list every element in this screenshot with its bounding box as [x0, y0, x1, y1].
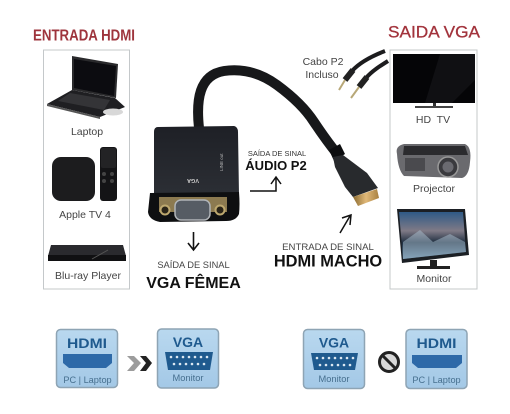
adapter front face	[148, 192, 240, 222]
badge: hdmi pc laptop: HDMI	[67, 336, 107, 351]
text: saida de sinal vga femea	[146, 260, 241, 292]
icon: projector	[397, 144, 470, 178]
adapter label: line out: LINE out	[219, 153, 224, 171]
panel: vga output devices	[390, 50, 477, 289]
cable	[198, 70, 338, 155]
text: hdmi macho: HDMI MACHO	[274, 252, 382, 270]
badge: hdmi pc laptop: PC | Laptop	[412, 375, 461, 385]
adapter body	[154, 126, 239, 196]
badge: vga monitor	[158, 329, 218, 388]
icon: laptop	[47, 56, 125, 119]
icon: prohibited sign	[380, 352, 398, 372]
panel: hdmi input devices	[44, 50, 130, 289]
icon: apple tv	[52, 147, 117, 201]
hdmi plug	[329, 144, 379, 206]
text: incluso: Incluso	[305, 69, 339, 81]
heading: saida vga: SAIDA VGA	[388, 24, 480, 42]
illustration: hdmi to vga adapter	[148, 70, 379, 222]
badge: hdmi pc laptop	[56, 330, 118, 388]
label: blu-ray player: Blu-ray Player	[55, 270, 121, 282]
badge: vga monitor: VGA	[173, 334, 203, 350]
label: apple tv 4: Apple TV 4	[59, 209, 111, 221]
callout: cabo p2 incluso	[303, 51, 388, 98]
badge: vga monitor: Monitor	[172, 373, 204, 383]
heading: entrada hdmi: ENTRADA HDMI	[33, 28, 135, 44]
text: saida de sinal audio p2: SAÍDA DE SINAL	[248, 149, 306, 158]
icon: blu-ray player	[48, 245, 126, 261]
text: entrada de sinal hdmi macho	[274, 242, 382, 270]
text: vga femea: VGA FÊMEA	[146, 273, 241, 292]
badge: hdmi pc laptop	[406, 330, 467, 388]
label: projector: Projector	[413, 183, 456, 195]
vga port	[159, 197, 227, 220]
text: entrada de sinal hdmi macho: ENTRADA DE SINAL	[282, 242, 375, 253]
badge: vga monitor: VGA	[319, 334, 349, 350]
icon: monitor	[397, 209, 469, 269]
badge: vga monitor	[304, 330, 364, 388]
adapter label: vga: VGA	[187, 177, 199, 183]
icon: hd tv	[393, 54, 475, 108]
arrow: to hdmi plug	[340, 215, 351, 233]
text: cabo p2: Cabo P2	[303, 56, 344, 68]
badge: vga monitor: Monitor	[318, 374, 350, 384]
label: laptop: Laptop	[71, 126, 103, 138]
badge: hdmi pc laptop: PC | Laptop	[63, 375, 112, 385]
badge: hdmi pc laptop: HDMI	[416, 336, 456, 351]
text: audio p2: ÁUDIO P2	[245, 158, 307, 173]
icon: p2 audio cables	[339, 51, 388, 98]
arrow: to vga output	[188, 232, 199, 250]
text: saida de sinal vga femea: SAÍDA DE SINAL	[157, 260, 230, 270]
text: saida de sinal audio p2	[245, 149, 307, 173]
arrow: to audio output	[250, 177, 281, 191]
icon: double chevron arrow	[127, 356, 152, 371]
label: monitor: Monitor	[416, 273, 452, 285]
label: hd tv: HD TV	[416, 114, 450, 126]
